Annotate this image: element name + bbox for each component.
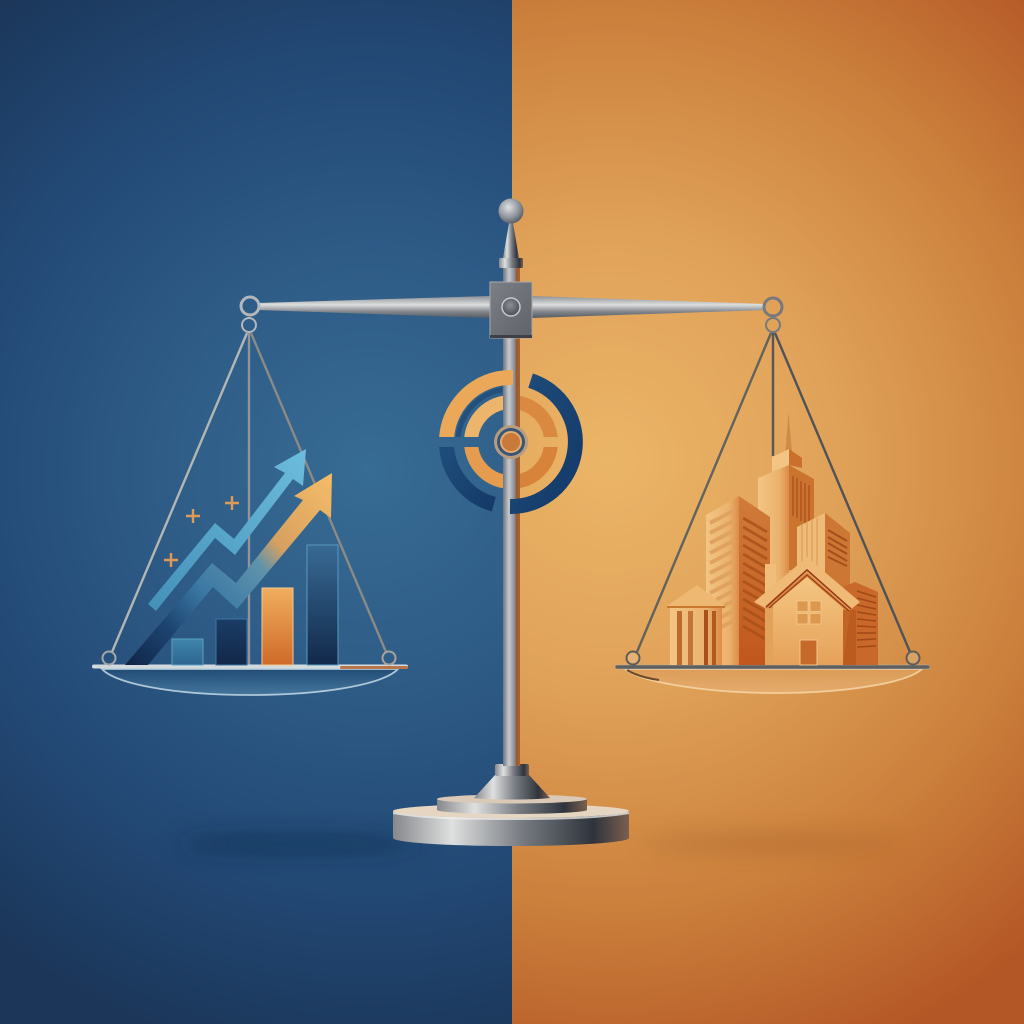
right navy arc — [510, 381, 575, 507]
door — [800, 640, 817, 665]
chimney — [765, 564, 776, 594]
rim — [615, 665, 930, 669]
far right building — [843, 582, 878, 665]
collar — [495, 764, 529, 776]
emblem outer arcs — [446, 378, 576, 507]
ring right — [906, 652, 920, 664]
rim — [92, 664, 408, 668]
finial — [498, 198, 524, 268]
stand base — [393, 764, 629, 846]
middle disc — [437, 794, 587, 814]
ring left — [102, 652, 116, 664]
house — [754, 557, 860, 665]
central tower — [758, 412, 814, 600]
left pan — [92, 652, 408, 695]
growth chart — [125, 449, 338, 665]
window — [797, 601, 821, 624]
bowl — [102, 669, 398, 695]
bar 1 — [172, 639, 203, 665]
bolt — [502, 298, 520, 316]
bar 2 — [216, 619, 247, 665]
pole — [503, 266, 520, 766]
left arm — [258, 296, 490, 318]
bottom disc — [393, 804, 629, 846]
lower left navy arc — [446, 440, 494, 504]
left pan strings — [112, 333, 386, 665]
ring left — [626, 652, 640, 664]
right end rings — [764, 298, 782, 332]
cone foot — [474, 775, 550, 800]
beam — [241, 296, 782, 332]
orange gradient arrow — [125, 473, 332, 665]
roof — [754, 557, 860, 610]
spike — [503, 223, 519, 258]
pivot block — [490, 282, 532, 338]
blue arrow — [148, 449, 306, 611]
bar 3 — [262, 588, 293, 665]
bowl — [625, 669, 922, 693]
collar — [499, 258, 523, 268]
left end rings — [241, 297, 259, 332]
emblem hub — [494, 425, 528, 459]
right pan strings — [637, 333, 910, 652]
city buildings — [667, 412, 878, 665]
right pan — [615, 652, 930, 693]
plus signs — [164, 496, 239, 567]
mid right building — [797, 513, 850, 600]
temple — [667, 585, 725, 665]
bowl highlight stroke — [627, 670, 659, 680]
right arm — [532, 296, 765, 318]
bar 4 — [307, 545, 338, 665]
left tall building — [706, 496, 770, 665]
emblem inner rings — [458, 389, 564, 495]
ring right — [382, 652, 396, 664]
ball — [498, 198, 524, 224]
top left orange arc — [439, 370, 513, 437]
